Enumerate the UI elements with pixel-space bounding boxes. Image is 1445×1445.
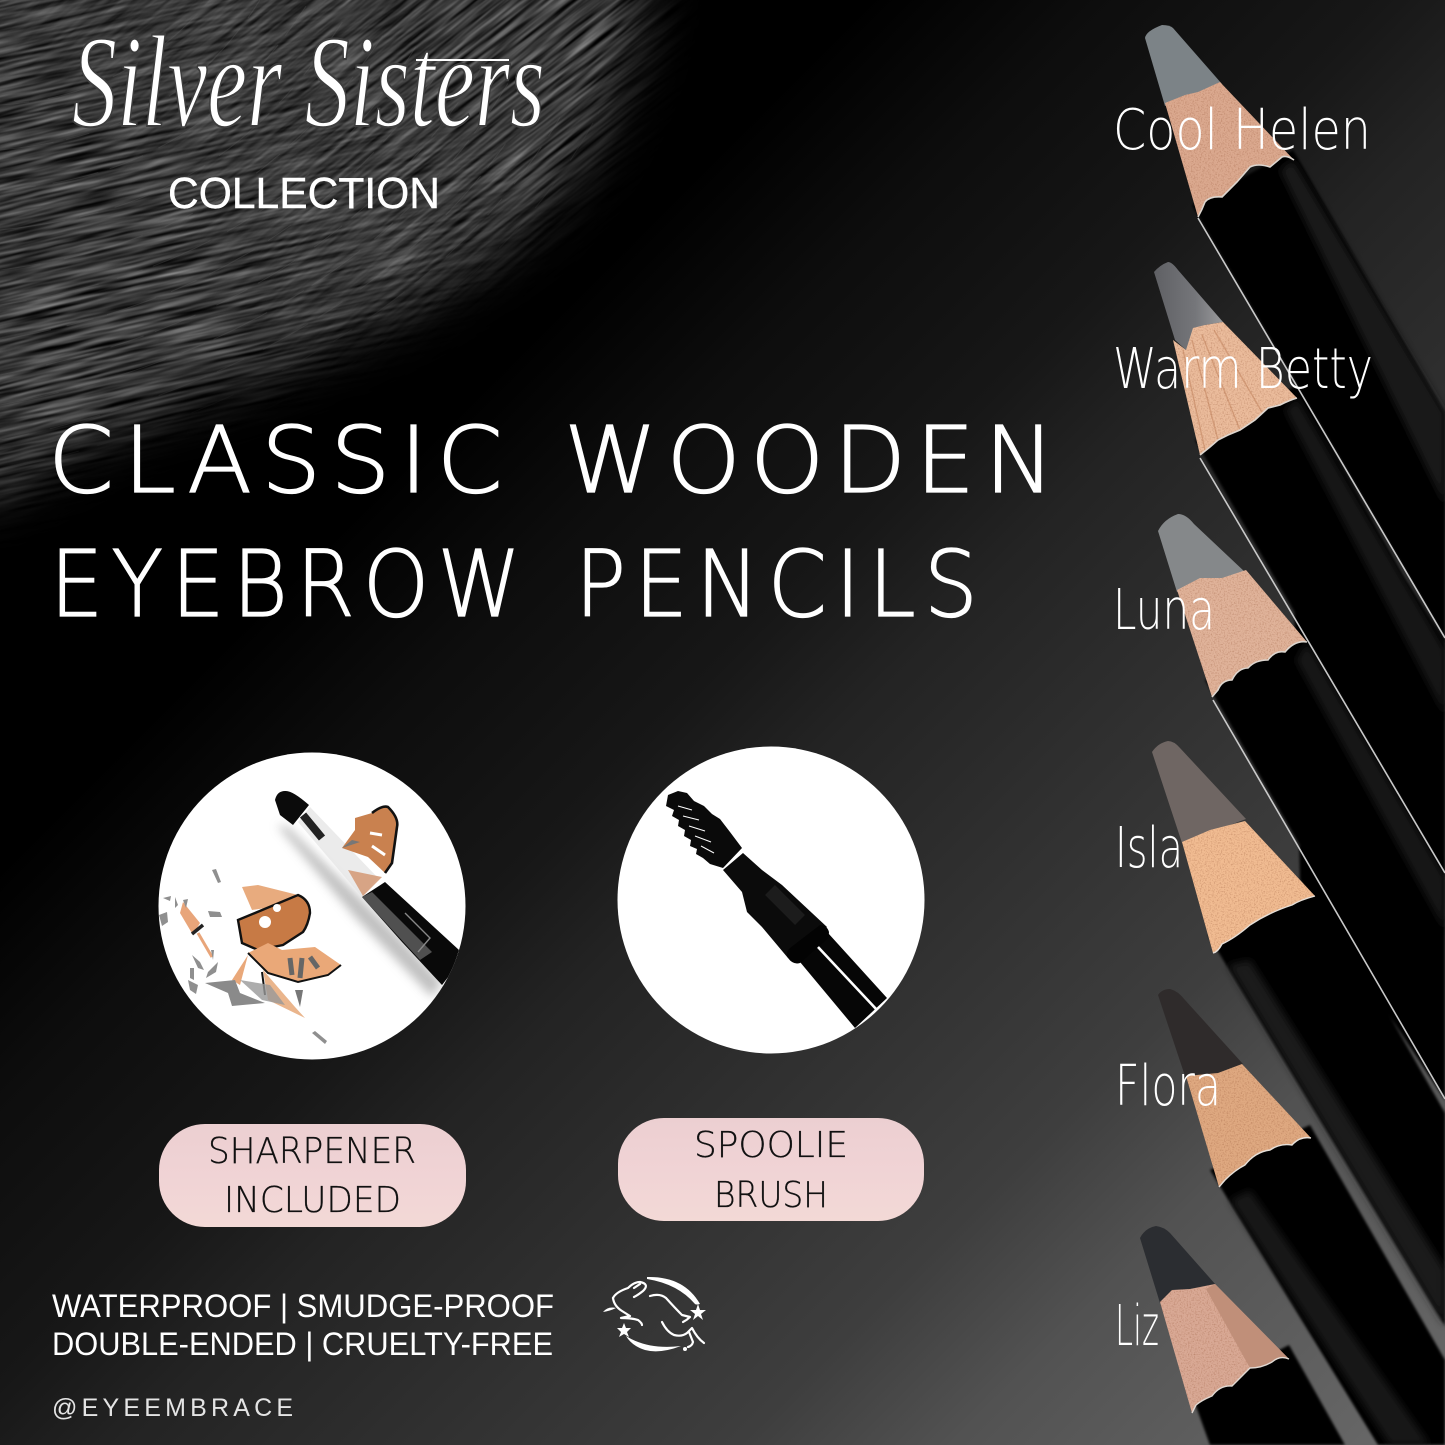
pencil: Warm Betty (1154, 262, 1297, 455)
callout: spoolie brush (618, 1118, 924, 1221)
text block: product features: DOUBLE-ENDED | CRUELTY-FREE (52, 1326, 553, 1362)
pencil: Liz (1140, 1226, 1289, 1413)
pencil shade names: Isla (1115, 816, 1183, 881)
wood shavings (180, 807, 397, 1018)
pencil lead chips (159, 869, 327, 1044)
pencil: Isla (1152, 741, 1315, 953)
sharpener body (275, 791, 459, 985)
pencil shade names: Luna (1113, 578, 1215, 643)
heading: classic wooden eyebrow pencils: EYEBROW (50, 531, 529, 638)
text block: product features (52, 1288, 554, 1362)
title: Silver Sisters: Silver Sisters (72, 10, 545, 155)
pencil shade names: Warm Betty (1113, 337, 1373, 402)
panel: sharpener photo circle (158, 752, 466, 1060)
text block: product features: WATERPROOF | SMUDGE-PROOF (52, 1288, 554, 1324)
sharpener shadow (277, 825, 442, 997)
pencil highlight lines (1198, 218, 1445, 1099)
pencil: Flora (1158, 989, 1311, 1187)
heading: classic wooden eyebrow pencils (48, 407, 1064, 638)
callout: sharpener included (159, 1124, 466, 1227)
hair texture photo (0, 0, 677, 520)
callout: spoolie brush: BRUSH (714, 1175, 828, 1216)
callout: sharpener included: INCLUDED (224, 1180, 401, 1221)
pencil: Luna (1158, 514, 1307, 697)
pencil shade names: Liz (1115, 1294, 1159, 1359)
spoolie handle (723, 853, 887, 1028)
callout: sharpener included: SHARPENER (208, 1131, 416, 1172)
pencil shade names (1113, 98, 1373, 1359)
panel: pencil barrels (1192, 150, 1445, 1445)
heading: classic wooden eyebrow pencils: WOODEN (564, 407, 1064, 514)
icon: leaping bunny cruelty-free logo (603, 1277, 706, 1351)
callout: spoolie brush: SPOOLIE (694, 1125, 848, 1166)
social handle: @EYEEMBRACE (52, 1394, 293, 1422)
pencil: Cool Helen (1145, 25, 1294, 217)
spoolie bristles (666, 791, 742, 868)
pencil shade names: Flora (1115, 1054, 1221, 1119)
pencil shade names: Cool Helen (1113, 98, 1371, 163)
subtitle: COLLECTION: COLLECTION (168, 169, 440, 218)
panel: spoolie photo circle (618, 746, 924, 1054)
heading: classic wooden eyebrow pencils: PENCILS (575, 531, 986, 638)
heading: classic wooden eyebrow pencils: CLASSIC (48, 407, 512, 514)
